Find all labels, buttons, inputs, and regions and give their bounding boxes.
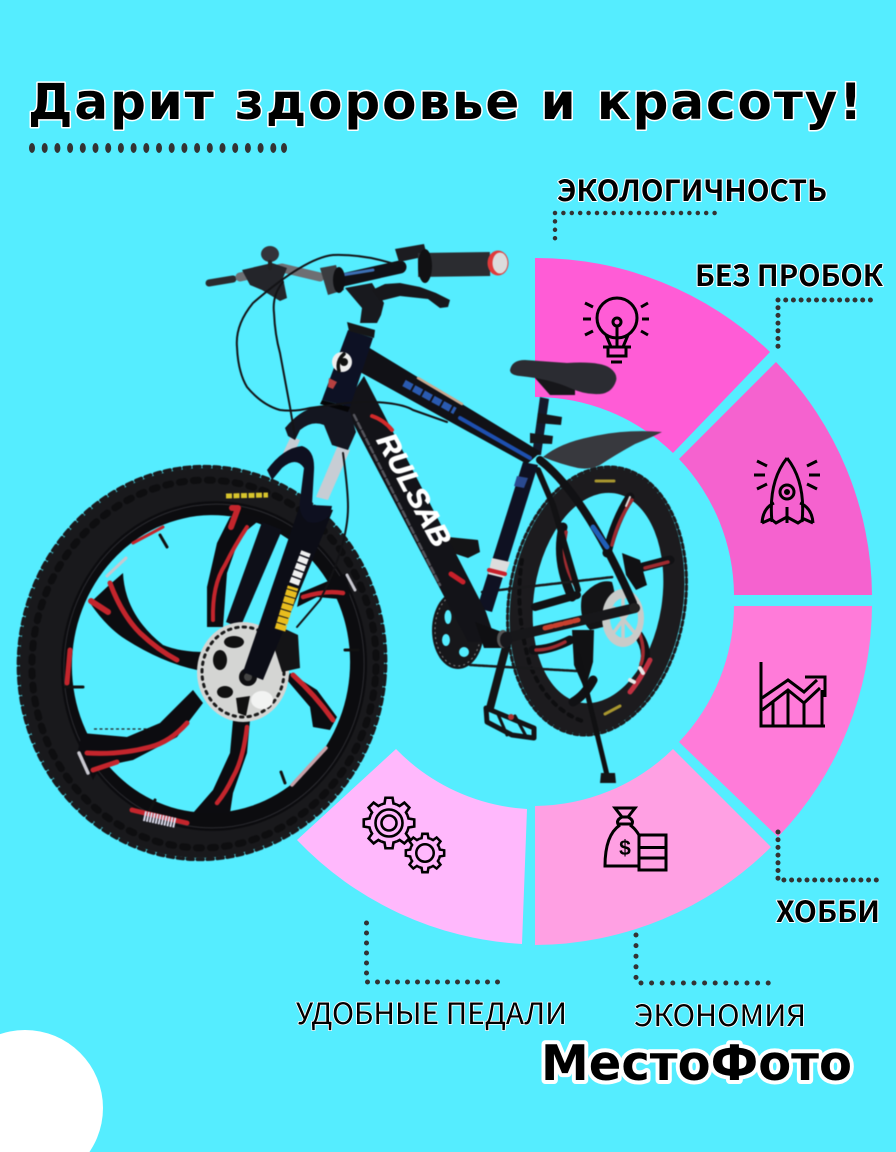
saddle [510,360,616,395]
panel: segment no traffic [679,362,872,595]
chain [470,577,613,671]
icon: light bulb [583,298,649,362]
panel: segment hobby [679,606,872,837]
icon: growth chart [761,662,825,726]
front wheel red decals [67,508,343,823]
title dotted underline [29,143,287,153]
connector: ecology [555,213,718,243]
connector: comfortable pedals [366,923,499,982]
label: ecology: ЭКОЛОГИЧНОСТЬ [557,168,827,210]
handlebar [209,244,508,308]
decorative white circle [0,1030,103,1152]
crank and near pedal [486,643,534,738]
connector: savings [636,935,774,983]
panel: segment comfortable pedals [297,749,527,944]
front wheel mag spokes [78,514,350,813]
bicycle [2,244,705,875]
front wheel far fork leg [226,522,282,628]
label: no traffic: БЕЗ ПРОБОК [695,253,884,295]
seat tube and post [477,397,562,612]
icon: rocket [754,458,820,523]
front rim [47,488,381,844]
connector: no traffic [778,300,878,348]
rim stickers and valves [66,535,358,823]
icon: money bag [605,808,666,870]
fork [243,405,356,680]
label: hobby: ХОББИ [776,889,880,931]
icon: gears [364,798,444,872]
bottom bracket [475,622,512,648]
brake caliper [275,628,300,672]
label: comfortable pedals: УДОБНЫЕ ПЕДАЛИ [296,991,567,1033]
label: savings: ЭКОНОМИЯ [634,993,806,1035]
title: Дарит здоровье и красоту! [28,73,862,131]
chain and seat stays [510,460,639,637]
tyre lettering [226,495,268,496]
chainring [432,591,484,669]
labels and connectors [296,168,884,1035]
rear fender [543,431,662,469]
thin dashed line on wheel [94,728,150,730]
panel: segment ecology [535,258,770,453]
connector: hobby [778,832,878,880]
brake cables [237,255,447,627]
icon: money bag: $ [619,837,631,860]
panel: segment savings [535,749,771,945]
front tyre [2,451,402,875]
brake disc [197,622,289,722]
kickstand [578,655,616,783]
top tube [360,347,541,464]
down tube with brand [344,376,496,642]
head tube [320,322,375,412]
down tube with brand: RULSAB [370,428,457,552]
rear wheel [489,454,705,748]
stem [345,283,384,323]
brand name: МестоФото [541,1035,852,1092]
rear cassette, disc, caliper, derailleur [535,553,647,690]
far pedal [448,537,480,558]
